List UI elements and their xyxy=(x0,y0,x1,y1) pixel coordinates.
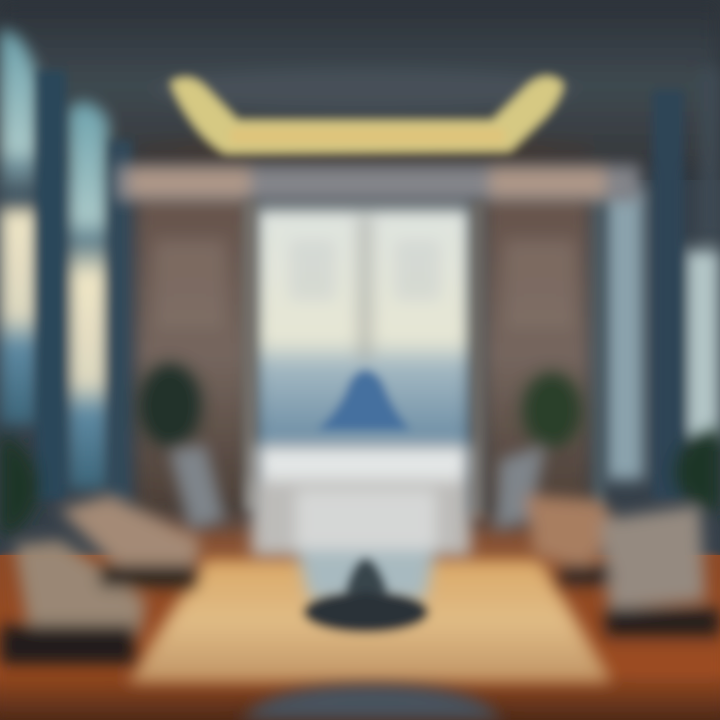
right side chairs xyxy=(495,445,720,636)
central window xyxy=(256,208,470,448)
right plant xyxy=(522,372,582,448)
window frame posts xyxy=(243,200,485,520)
ceiling light: yellow curved fixture xyxy=(170,76,564,154)
central mountain silhouette xyxy=(318,370,410,430)
floor xyxy=(0,555,720,720)
ceiling xyxy=(0,0,720,170)
bottom grey round rug xyxy=(242,684,502,720)
white table and chairs xyxy=(252,444,470,600)
left foreground plant xyxy=(0,433,38,537)
floor base under furniture xyxy=(130,525,600,575)
black seat in the foreground xyxy=(304,558,428,632)
rug xyxy=(128,560,612,682)
left plant xyxy=(138,363,202,447)
left pillars xyxy=(36,70,132,500)
left windows xyxy=(0,30,108,490)
right windows xyxy=(606,70,720,480)
right pillars xyxy=(590,90,684,510)
left wood wall panel xyxy=(136,195,250,515)
header beam across the room xyxy=(115,165,640,201)
left side chairs xyxy=(0,445,225,665)
right foreground plant xyxy=(675,428,720,512)
right wood wall panel xyxy=(484,195,590,515)
